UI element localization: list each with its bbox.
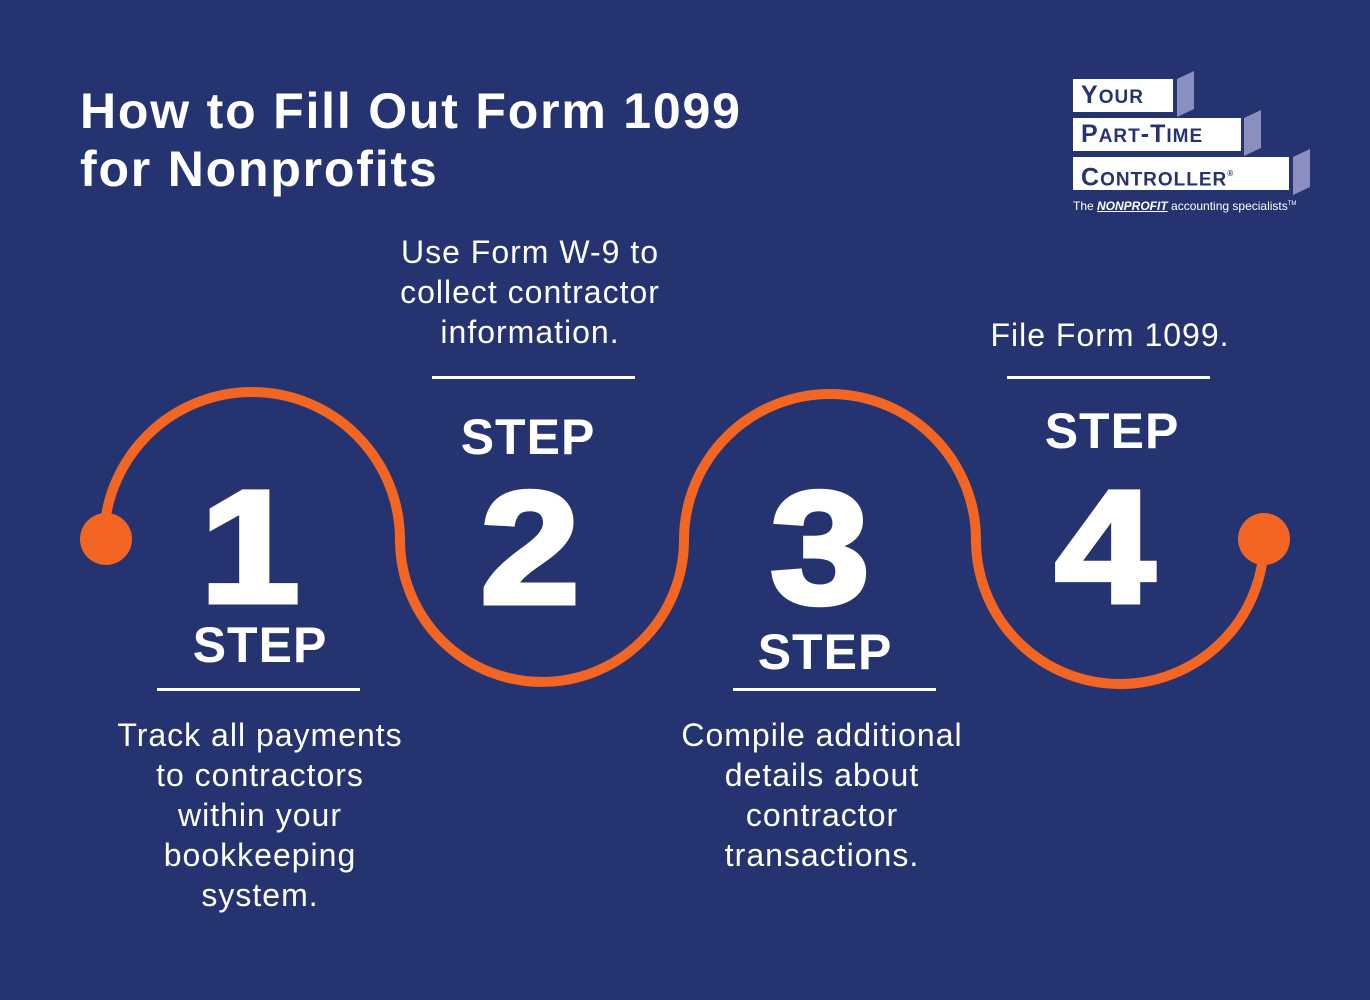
title	[80, 83, 742, 197]
logo	[1073, 71, 1310, 213]
step 1: 1	[200, 457, 300, 636]
step 2: 2	[480, 458, 580, 637]
step 3: Compile additional details about contractor transactions.	[681, 717, 963, 873]
title: How to Fill Out Form 1099	[80, 83, 742, 139]
step 4	[990, 317, 1230, 636]
step 3	[681, 458, 963, 873]
logo: The NONPROFIT accounting specialistsTM	[1073, 199, 1296, 213]
logo: PART-TIME	[1081, 120, 1203, 148]
logo: CONTROLLER®	[1081, 163, 1234, 191]
step 4: File Form 1099.	[990, 317, 1230, 353]
title: for Nonprofits	[80, 141, 438, 197]
step 2: Use Form W-9 to collect contractor information.	[400, 234, 660, 350]
logo: YOUR	[1081, 81, 1144, 109]
step 4: 4	[1055, 457, 1155, 636]
step 1	[117, 457, 403, 913]
step 3: 3	[770, 458, 870, 637]
step 1: STEP	[193, 617, 327, 673]
step 4: STEP	[1045, 403, 1179, 459]
step 2: STEP	[461, 409, 595, 465]
step 1: Track all payments to contractors within your bookkeeping system.	[117, 717, 403, 913]
step 3: STEP	[758, 624, 892, 680]
step 2	[400, 234, 660, 637]
